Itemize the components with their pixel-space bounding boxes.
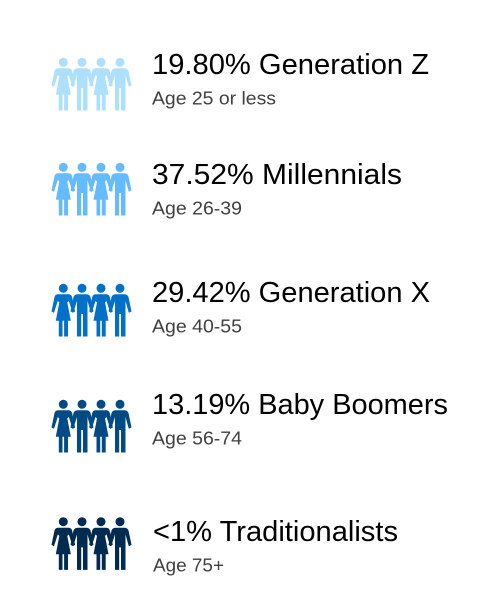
text: Age 25 or less: Age 25 or less xyxy=(152,88,276,108)
icon: Traditionalists people xyxy=(52,517,132,570)
icon: Millennials people xyxy=(52,163,132,216)
heading: Generation Z: 19.80% Generation Z xyxy=(152,49,429,81)
text: Age 40-55: Age 40-55 xyxy=(152,316,242,336)
icon: Baby Boomers people xyxy=(52,400,132,452)
text: Age 26-39: Age 26-39 xyxy=(152,198,242,218)
icon: Generation X people xyxy=(52,284,132,336)
heading: Baby Boomers: 13.19% Baby Boomers xyxy=(152,389,448,421)
heading: Millennials: 37.52% Millennials xyxy=(152,159,402,191)
heading: Generation X: 29.42% Generation X xyxy=(152,277,430,309)
text: Age 56-74: Age 56-74 xyxy=(152,428,242,448)
text: Age 75+: Age 75+ xyxy=(153,556,224,576)
heading: Traditionalists: <1% Traditionalists xyxy=(153,516,398,548)
icon: Generation Z people xyxy=(52,58,132,110)
